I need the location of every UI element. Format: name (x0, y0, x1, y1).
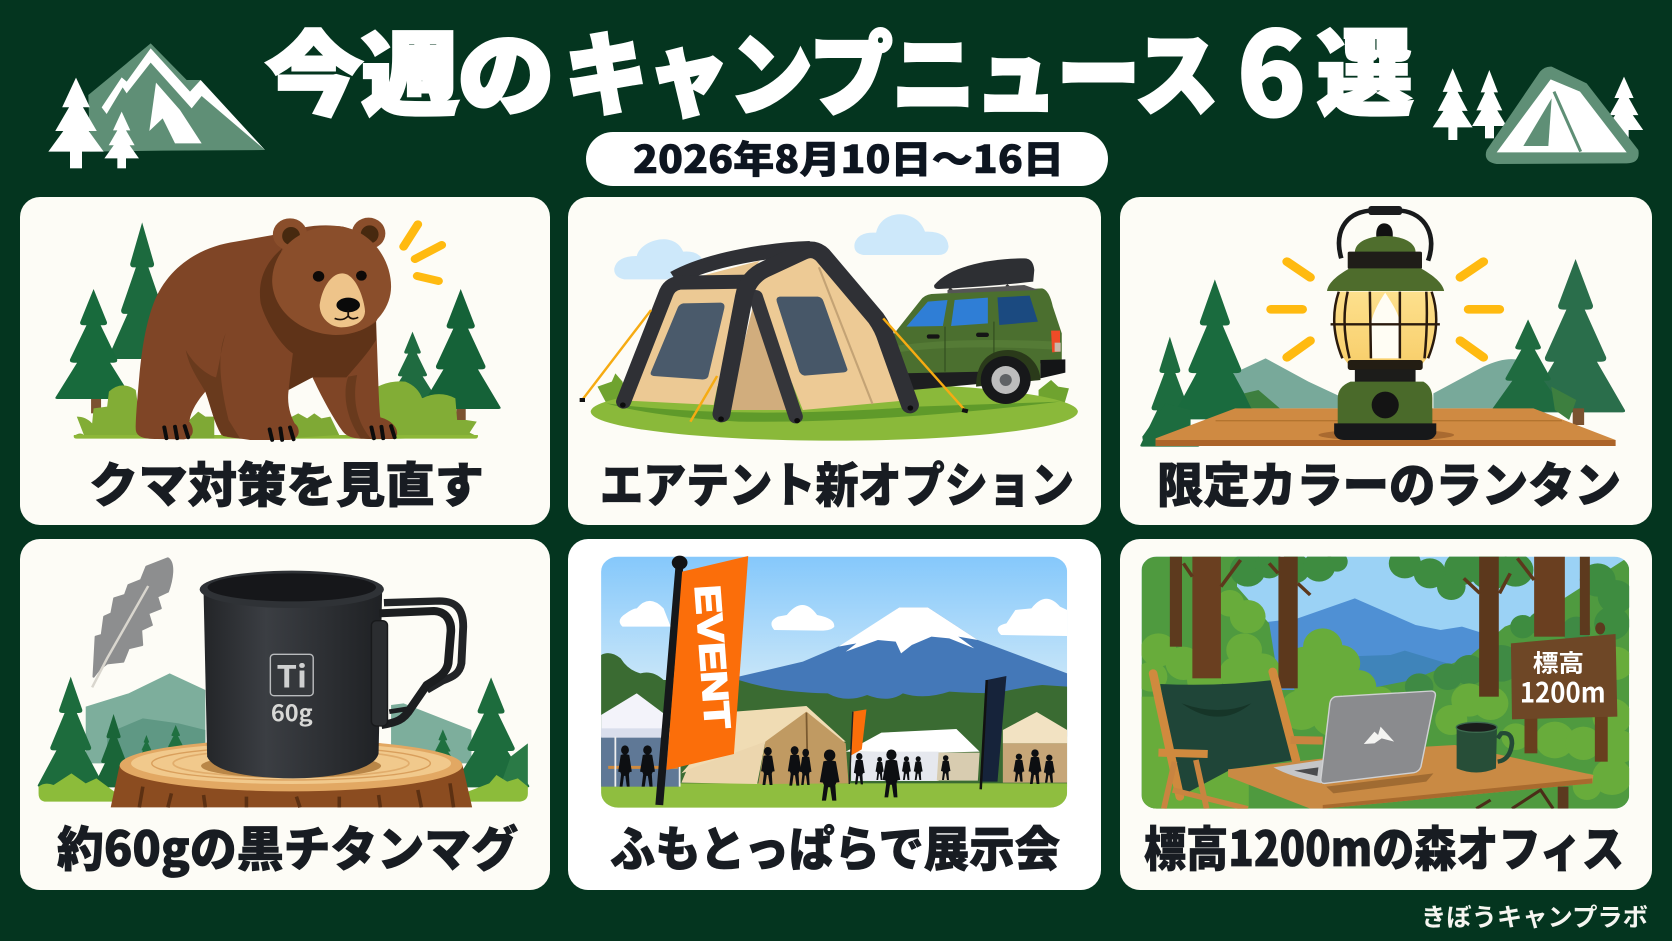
illustration: event at foot of Mt. Fuji (601, 556, 1067, 808)
icon: tent with trees (1433, 67, 1643, 164)
illustration: air tent and car (580, 214, 1078, 441)
illustration: event at foot of Mt. Fuji: EVENT (687, 584, 737, 730)
panel: ランタン (1120, 197, 1652, 525)
label: クマ対策を見直す (89, 446, 484, 516)
illustration: forest office: 1200m (1520, 671, 1606, 711)
illustration: titanium mug on stump: Ti (277, 653, 307, 697)
illustration: titanium mug on stump (38, 558, 529, 807)
title: 今週の (266, 3, 554, 133)
illustration: forest office (1135, 548, 1637, 810)
title: 選 (1317, 0, 1413, 135)
illustration: forest office: 標高 (1533, 645, 1584, 679)
label: ふもとっぱらで展示会 (610, 810, 1060, 880)
date pill: 2026年8月10日〜16日 (633, 129, 1064, 184)
illustration: bear in forest (55, 218, 501, 440)
title (266, 0, 1413, 150)
panel: チタンマグ (20, 539, 550, 890)
footer credit: きぼうキャンプラボ (1421, 898, 1648, 934)
label: 限定カラーのランタン (1157, 446, 1621, 516)
panel: クマ対策 (20, 197, 550, 525)
icon: mountain with trees (48, 43, 265, 168)
panel: エアテント (568, 197, 1101, 525)
title: キャンプニュース (565, 3, 1218, 133)
label: 約60gの黒チタンマグ (57, 810, 518, 880)
panel: 森オフィス (1120, 539, 1652, 890)
label: エアテント新オプション (600, 446, 1074, 516)
panel: 展示会 (568, 539, 1101, 890)
illustration: titanium mug on stump: 60g (271, 696, 313, 728)
illustration: lantern on table (1140, 206, 1625, 447)
